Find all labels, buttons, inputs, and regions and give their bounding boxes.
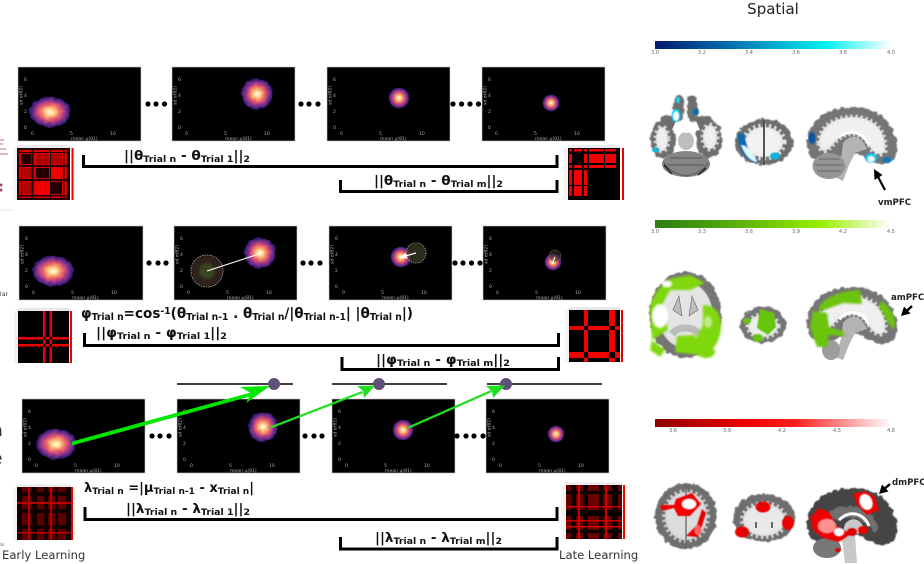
formula: lambda trial m: || xyxy=(486,531,495,546)
plot: row 3 last trial: mean μ(θ1) xyxy=(539,468,566,474)
ellipsis dots row 3 xyxy=(149,433,486,439)
plot: row 2 trial 1: 10 xyxy=(111,290,117,296)
plot: row 3 trial n: 2 xyxy=(183,441,186,447)
formula: phi trial 1: Trial n xyxy=(117,332,151,342)
plot: row 3 trial n: 4 xyxy=(183,425,186,431)
plot: row 1 trial m: 0 xyxy=(340,131,343,137)
formula: angle definition: |) xyxy=(402,306,413,322)
plot: row 1 trial 1: 5 xyxy=(70,131,73,137)
matrix: row 3 late learning xyxy=(561,482,625,539)
formula: phi trial 1: ||φ xyxy=(96,326,116,341)
formula: theta trial m: ||θ xyxy=(374,174,392,189)
formula: theta trial 1: ||θ xyxy=(124,149,142,164)
plot: row 1 trial m: 5 xyxy=(379,131,382,137)
matrix: row 2 late learning xyxy=(565,307,623,362)
label: early learning: Early Learning xyxy=(2,548,85,562)
brain: green axial slice xyxy=(650,272,722,358)
formula: angle definition: φ xyxy=(81,306,92,322)
formula: phi trial m: Trial n xyxy=(397,359,430,369)
arrow: green prediction error 3 xyxy=(407,386,505,429)
plot: row 2 trial n with angle vector: 5 xyxy=(226,290,229,296)
plot: row 3 trial 1: 5 xyxy=(74,463,77,469)
brain: blue axial slice xyxy=(650,95,722,177)
plot: row 2 trial n with angle vector: 10 xyxy=(266,290,272,296)
plot: row 1 trial 1: 4 xyxy=(24,93,27,99)
plot: row 2 last trial: sd σ(θ2) xyxy=(484,245,490,264)
bracket: row 2 trial 1 comparison xyxy=(84,333,558,346)
plot: row 2 trial n with angle vector: 0 xyxy=(187,290,190,296)
plot: row 3 trial m: mean μ(θ1) xyxy=(385,468,412,474)
formula: lambda definition: - x xyxy=(195,481,218,496)
formula: theta trial m: Trial m xyxy=(451,180,487,190)
plot: row 1 trial m: 10 xyxy=(419,131,425,137)
colorbar: green scale xyxy=(651,220,895,235)
arrow: green prediction error 2 xyxy=(270,386,375,428)
formula: theta trial 1: - θ xyxy=(176,149,201,164)
colorbar: blue scale: 3.6 xyxy=(792,50,800,56)
bracket: row 1 trial m comparison xyxy=(340,180,557,192)
brain: red coronal slice xyxy=(733,494,795,542)
label: amPFC with arrow: amPFC xyxy=(891,293,924,303)
plot: row 3 trial m: sd σ(θ2) xyxy=(332,418,338,437)
plot: row 3 last trial: 2 xyxy=(492,441,495,447)
plot: row 3 trial 1: mean μ(θ1) xyxy=(75,468,102,474)
plot: row 3 trial m: 10 xyxy=(424,463,430,469)
colorbar: blue scale: 3.2 xyxy=(698,50,706,56)
plot: row 3 trial 1: sd σ(θ2) xyxy=(22,418,28,437)
plot: row 3 trial 1 xyxy=(22,399,145,474)
plot: row 3 trial m: 0 xyxy=(345,463,348,469)
label: vmPFC with arrow: vmPFC xyxy=(878,198,911,208)
panel: prediction error row 3 xyxy=(22,378,609,474)
plot: row 1 trial n: 0 xyxy=(178,125,181,131)
formula: theta trial m: Trial n xyxy=(393,180,426,190)
formula: theta trial 1: || xyxy=(233,149,243,164)
plot: row 2 trial m with angle vector: sd σ(θ2) xyxy=(330,245,336,264)
plot: row 3 last trial: 10 xyxy=(578,463,584,469)
plot: row 3 trial n xyxy=(177,399,300,474)
formula: phi trial 1: 2 xyxy=(220,332,227,342)
formula: theta trial m: 2 xyxy=(496,180,503,190)
plot: row 1 last trial: 4 xyxy=(488,93,491,99)
plot: row 1 last trial xyxy=(482,67,605,142)
plot: row 2 trial n with angle vector: mean μ(θ1) xyxy=(227,295,254,301)
formula: angle definition: =cos xyxy=(124,306,160,322)
formula: angle definition: Trial n-1 xyxy=(304,312,346,323)
formula: lambda trial 1: 2 xyxy=(243,508,250,518)
plot: row 2 trial m with angle vector: mean μ(θ1) xyxy=(382,295,409,301)
plot: row 1 trial m: 4 xyxy=(333,93,336,99)
colorbar: green scale: 4.5 xyxy=(887,229,895,235)
plot: row 1 last trial: 0 xyxy=(495,131,498,137)
formula: phi trial m: Trial m xyxy=(457,359,493,369)
brain: green sagittal slice with amPFC xyxy=(807,287,897,360)
formula: angle definition: Trial n xyxy=(370,312,402,323)
colorbar: blue scale: 3.8 xyxy=(839,50,847,56)
formula: lambda definition: =|μ xyxy=(124,481,154,496)
plot: row 2 last trial: 10 xyxy=(575,290,581,296)
brain: red axial slice xyxy=(655,483,717,549)
label: late learning: Late Learning xyxy=(559,548,638,562)
plot: row 3 trial m xyxy=(332,399,455,474)
plot: row 3 trial n: 6 xyxy=(183,409,186,415)
slider track 2 xyxy=(332,378,447,390)
plot: row 2 trial n with angle vector: 0 xyxy=(180,284,183,290)
plot: row 1 last trial: sd σ(θ2) xyxy=(482,86,488,105)
plot: row 3 trial m: 6 xyxy=(338,409,341,415)
plot: row 2 trial m with angle vector: 0 xyxy=(342,290,345,296)
formula: lambda trial 1: ||λ xyxy=(126,502,144,517)
plot: row 1 trial n: 0 xyxy=(185,131,188,137)
formula: theta trial m: - θ xyxy=(426,174,451,189)
colorbar: green scale: 3.0 xyxy=(651,229,659,235)
plot: row 2 trial n with angle vector: 6 xyxy=(180,236,183,242)
bracket: row 1 trial 1 comparison xyxy=(84,155,557,166)
plot: row 1 last trial: 10 xyxy=(574,131,580,137)
plot: row 2 trial m with angle vector: 2 xyxy=(335,268,338,274)
formula: phi trial m: ||φ xyxy=(376,353,396,368)
plot: row 2 trial m with angle vector: 10 xyxy=(421,290,427,296)
plot: row 3 last trial: 6 xyxy=(492,409,495,415)
formula: lambda trial m: - λ xyxy=(426,531,450,546)
plot: row 3 trial m: 4 xyxy=(338,425,341,431)
formula: angle definition: Trial n-1 xyxy=(186,312,228,323)
matrix: row 3 early learning xyxy=(13,484,73,540)
colorbar: red scale: 4.5 xyxy=(833,428,841,434)
plot: row 3 last trial: 4 xyxy=(492,425,495,431)
plot: row 1 trial m: 2 xyxy=(333,109,336,115)
plot: row 1 trial 1: sd σ(θ2) xyxy=(18,86,24,105)
plot: row 2 trial m with angle vector: 0 xyxy=(335,284,338,290)
slider track 1 xyxy=(177,378,293,390)
plot: row 1 last trial: 5 xyxy=(534,131,537,137)
matrix: row 2 early learning xyxy=(14,308,72,363)
formula: lambda trial m: ||λ xyxy=(375,531,393,546)
colorbar: green scale: 3.6 xyxy=(745,229,753,235)
colorbar: red scale: 3.6 xyxy=(669,428,677,434)
plot: row 1 trial n: 2 xyxy=(178,109,181,115)
formula: lambda definition: λ xyxy=(84,481,92,496)
plot: row 2 trial m with angle vector: 4 xyxy=(335,252,338,258)
formula: phi trial 1: - φ xyxy=(151,326,177,341)
colorbar: blue scale xyxy=(651,41,895,56)
panel: spatial density row 1 xyxy=(18,67,605,142)
ellipsis dots row 1 xyxy=(145,101,481,107)
plot: row 2 last trial: 2 xyxy=(489,268,492,274)
colorbar: red scale xyxy=(655,419,895,434)
plot: row 3 last trial: 5 xyxy=(538,463,541,469)
plot: row 2 trial 1: 0 xyxy=(32,290,35,296)
formula: lambda trial 1: Trial 1 xyxy=(201,508,234,518)
plot: row 1 trial m xyxy=(327,67,450,142)
colorbar: green scale: 3.9 xyxy=(792,229,800,235)
label: vmPFC with arrow xyxy=(874,169,911,208)
formula: lambda trial 1: Trial n xyxy=(145,508,177,518)
brain: blue sagittal slice with vmPFC xyxy=(807,107,897,181)
plot: row 2 last trial: 5 xyxy=(535,290,538,296)
formula: lambda trial m: Trial n xyxy=(393,537,426,547)
colorbar: blue scale: 3.4 xyxy=(745,50,753,56)
plot: row 3 last trial: 0 xyxy=(499,463,502,469)
formula: lambda trial 1: || xyxy=(234,502,243,517)
plot: row 1 last trial: 6 xyxy=(488,77,491,83)
plot: row 1 trial 1: 10 xyxy=(110,131,116,137)
formula: theta trial 1: 2 xyxy=(243,155,250,165)
matrix: row 1 early learning xyxy=(13,145,74,200)
plot: row 3 trial 1: 4 xyxy=(28,425,31,431)
formula: angle definition: (θ xyxy=(171,306,187,322)
plot: row 3 trial m: 0 xyxy=(338,457,341,463)
plot: row 3 trial m: 5 xyxy=(384,463,387,469)
plot: row 2 trial n with angle vector xyxy=(174,226,297,301)
plot: row 1 last trial: 2 xyxy=(488,109,491,115)
plot: row 3 trial 1: 0 xyxy=(35,463,38,469)
formula: angle definition: Trial n xyxy=(252,312,285,323)
plot: row 2 trial 1: 0 xyxy=(25,284,28,290)
plot: row 1 trial n: 6 xyxy=(178,77,181,83)
plot: row 1 trial 1: 6 xyxy=(24,77,27,83)
plot: row 3 trial n: 5 xyxy=(229,463,232,469)
formula: theta trial 1: Trial 1 xyxy=(201,155,233,165)
plot: row 3 trial 1: 6 xyxy=(28,409,31,415)
plot: row 1 trial 1: 0 xyxy=(24,125,27,131)
colorbar: red scale: 4.8 xyxy=(887,428,895,434)
plot: row 3 trial n: sd σ(θ2) xyxy=(178,418,184,437)
plot: row 2 trial 1: mean μ(θ1) xyxy=(72,295,99,301)
colorbar: blue scale: 3.0 xyxy=(651,50,659,56)
heading: Spatial: Spatial xyxy=(747,0,799,18)
bracket: row 3 trial 1 comparison xyxy=(85,507,557,520)
plot: row 1 trial m: 0 xyxy=(333,125,336,131)
plot: row 2 last trial: 6 xyxy=(489,236,492,242)
plot: row 2 trial 1: 5 xyxy=(71,290,74,296)
formula: lambda definition: | xyxy=(249,481,254,496)
formula: angle definition: . θ xyxy=(228,306,253,322)
plot: row 1 trial m: 6 xyxy=(333,77,336,83)
plot: row 3 last trial: sd σ(θ2) xyxy=(486,418,492,437)
formula: lambda definition: Trial n xyxy=(92,487,124,497)
panel: angular error row 2 xyxy=(19,226,606,301)
plot: row 3 trial n: 10 xyxy=(269,463,275,469)
slider track 3 xyxy=(487,378,602,390)
plot: row 3 trial n: mean μ(θ1) xyxy=(230,468,257,474)
formula: angle definition: -1 xyxy=(160,306,171,317)
formula: angle definition: /|θ xyxy=(284,306,304,322)
formula: phi trial 1: Trial 1 xyxy=(177,332,210,342)
plot: row 2 trial n with angle vector: 4 xyxy=(180,252,183,258)
brain: green coronal slice xyxy=(740,307,786,343)
plot: row 3 trial 1: 10 xyxy=(114,463,120,469)
plot: row 1 trial n: sd σ(θ2) xyxy=(172,86,178,105)
plot: row 2 last trial xyxy=(483,226,606,301)
plot: row 2 trial m with angle vector: 6 xyxy=(335,236,338,242)
formula: phi trial m: 2 xyxy=(503,359,510,369)
plot: row 1 trial n xyxy=(172,67,295,142)
bracket: row 2 trial m comparison xyxy=(342,357,558,370)
plot: row 1 last trial: 0 xyxy=(488,125,491,131)
label: amPFC with arrow xyxy=(891,293,924,316)
arrow: green prediction error 1 xyxy=(72,386,270,446)
plot: row 2 trial m with angle vector: 5 xyxy=(381,290,384,296)
formula: phi trial 1: || xyxy=(210,326,220,341)
colorbar: green scale: 3.3 xyxy=(698,229,706,235)
plot: row 1 trial m: sd σ(θ2) xyxy=(328,86,334,105)
formula: lambda trial 1: - λ xyxy=(177,502,201,517)
plot: row 3 trial n: 0 xyxy=(183,457,186,463)
formula: lambda definition: Trial n xyxy=(218,487,249,497)
clipped left edge fragments xyxy=(0,140,12,547)
bracket: row 3 trial m comparison xyxy=(340,537,557,549)
plot: row 1 trial n: 5 xyxy=(224,131,227,137)
formula: lambda trial m: 2 xyxy=(495,537,502,547)
formula: theta trial 1: Trial n xyxy=(143,155,176,165)
plot: row 2 trial m with angle vector xyxy=(329,226,452,301)
plot: row 2 trial n with angle vector: sd σ(θ2) xyxy=(174,245,180,264)
plot: row 1 trial 1: 0 xyxy=(31,131,34,137)
plot: row 3 trial 1: 2 xyxy=(28,441,31,447)
formula: lambda definition: Trial n-1 xyxy=(153,487,195,497)
plot: row 1 trial n: 10 xyxy=(264,131,270,137)
matrix: row 1 late learning xyxy=(564,145,624,200)
brain: red sagittal slice with dmPFC xyxy=(807,488,897,563)
plot: row 1 trial n: 4 xyxy=(178,93,181,99)
plot: row 1 trial m: mean μ(θ1) xyxy=(380,136,407,142)
plot: row 2 trial 1 xyxy=(19,226,143,301)
colorbar: red scale: 4.2 xyxy=(778,428,786,434)
colorbar: green scale: 4.2 xyxy=(839,229,847,235)
plot: row 1 trial 1: mean μ(θ1) xyxy=(71,136,98,142)
plot: row 3 trial m: 2 xyxy=(338,441,341,447)
plot: row 2 trial n with angle vector: 2 xyxy=(180,268,183,274)
ellipsis dots row 2 xyxy=(146,260,483,266)
plot: row 2 trial 1: 2 xyxy=(25,268,28,274)
formula: angle definition: Trial n xyxy=(92,312,124,323)
formula: theta trial m: || xyxy=(487,174,496,189)
plot: row 3 trial 1: 0 xyxy=(28,457,31,463)
plot: row 1 trial 1: 2 xyxy=(24,109,27,115)
plot: row 2 last trial: 0 xyxy=(489,284,492,290)
plot: row 1 last trial: mean μ(θ1) xyxy=(535,136,562,142)
plot: row 3 trial n: 0 xyxy=(190,463,193,469)
plot: row 2 trial 1: sd σ(θ2) xyxy=(20,245,26,264)
plot: row 2 trial 1: 6 xyxy=(25,236,28,242)
colorbar: blue scale: 4.0 xyxy=(887,50,895,56)
plot: row 2 last trial: mean μ(θ1) xyxy=(536,295,563,301)
plot: row 2 trial 1: 4 xyxy=(25,252,28,258)
formula: phi trial m: - φ xyxy=(430,353,457,368)
plot: row 2 last trial: 4 xyxy=(489,252,492,258)
colorbar: red scale: 3.9 xyxy=(723,428,731,434)
plot: row 2 last trial: 0 xyxy=(496,290,499,296)
plot: row 3 last trial: 0 xyxy=(492,457,495,463)
formula: phi trial m: || xyxy=(493,353,503,368)
formula: angle definition: | |θ xyxy=(346,306,370,322)
formula: lambda trial m: Trial m xyxy=(450,537,486,547)
label: dmPFC with arrow xyxy=(879,478,924,494)
plot: row 1 trial 1 xyxy=(18,67,141,142)
plot: row 1 trial n: mean μ(θ1) xyxy=(225,136,252,142)
brain: blue coronal slice xyxy=(735,119,793,165)
plot: row 3 last trial xyxy=(486,399,609,474)
